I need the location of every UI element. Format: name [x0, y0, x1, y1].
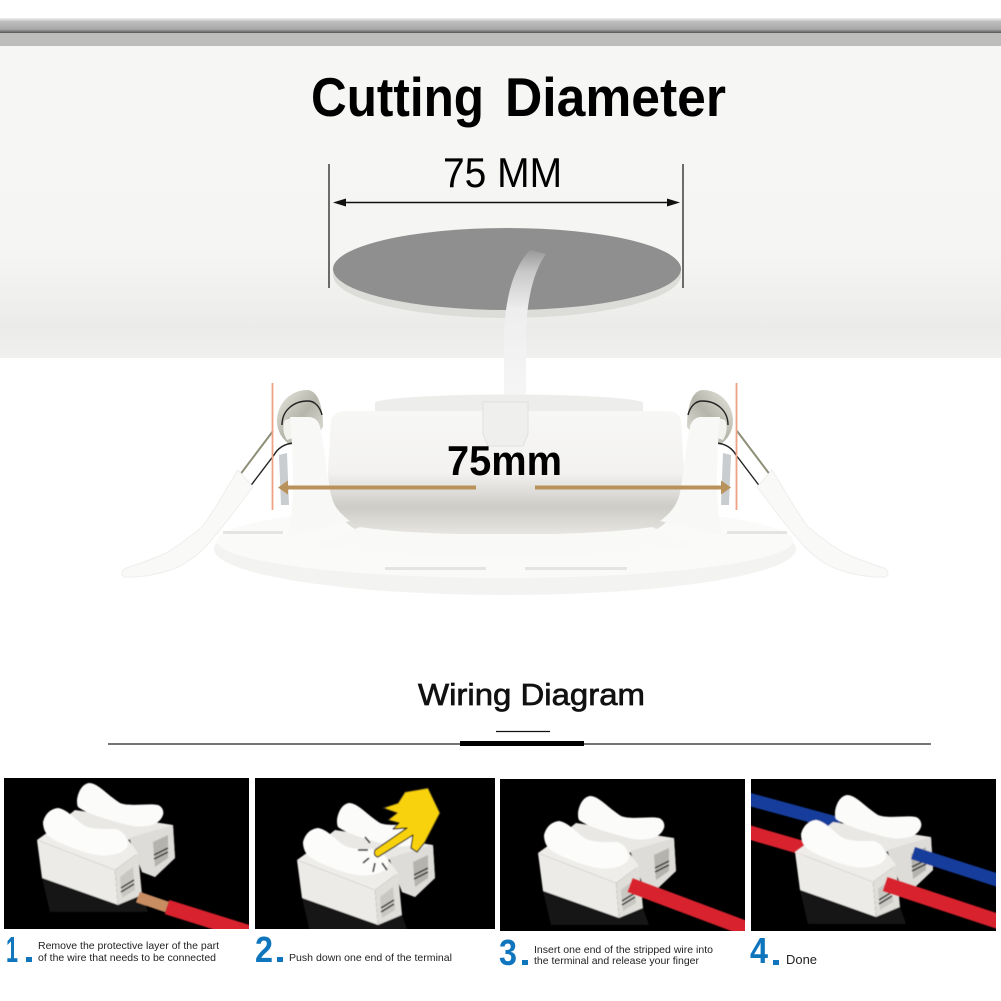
- step 4 caption: 4: [750, 930, 768, 971]
- cut hole: [333, 228, 681, 318]
- base ring: [316, 527, 692, 556]
- cable: [504, 250, 546, 398]
- step 3 caption: Insert one end of the stripped wire into: [534, 944, 713, 956]
- dimension: 75 MM: 75 MM: [443, 149, 562, 196]
- panel: step 1: [4, 778, 250, 933]
- top cap: [375, 394, 643, 422]
- left clip: [122, 390, 350, 577]
- downlight: [122, 390, 888, 595]
- wiring heading: Wiring Diagram: [418, 677, 645, 712]
- icon: yellow pointing hand: [374, 788, 440, 857]
- title: Cutting: [311, 66, 484, 128]
- right clip: [660, 390, 888, 577]
- step 1 caption: 1: [6, 929, 18, 970]
- step 1 caption: Remove the protective layer of the part: [38, 940, 219, 952]
- panel: step 2: [255, 778, 495, 932]
- red wire: [630, 885, 750, 930]
- step 4 caption: Done: [786, 952, 817, 967]
- panel: step 4: [748, 779, 1000, 931]
- title: [311, 66, 726, 128]
- ceiling panel: [0, 46, 1001, 358]
- title: Diameter: [505, 66, 726, 128]
- blue wire back: [748, 799, 840, 824]
- panel: step 3: [500, 779, 750, 931]
- press burst marks: [358, 837, 387, 872]
- step 2 caption: Push down one end of the terminal: [289, 952, 452, 964]
- blue wire front: [913, 853, 1000, 881]
- step 3 caption: 3: [499, 932, 517, 973]
- dimension: 75mm: [278, 437, 731, 494]
- step 2 caption: 2: [255, 929, 273, 970]
- stripped copper wire: [138, 897, 167, 907]
- step 1 caption: [6, 929, 219, 970]
- red wire front: [885, 884, 1000, 922]
- ceiling rail: [0, 18, 1001, 46]
- step 2 caption: [255, 929, 452, 970]
- red wire: [167, 907, 250, 933]
- step 3 caption: the terminal and release your finger: [534, 955, 699, 967]
- dimension: 75mm: 75mm: [447, 437, 562, 484]
- heading rule: [108, 732, 931, 746]
- dimension: 75 MM: [329, 149, 683, 288]
- orange guide lines: [272, 383, 736, 510]
- red wire back: [748, 832, 810, 850]
- step 1 caption: of the wire that needs to be connected: [38, 952, 216, 964]
- notch: [483, 402, 528, 446]
- step 4 caption: [750, 930, 817, 971]
- flange: [214, 503, 796, 595]
- step 3 caption: [499, 932, 713, 973]
- cup body: [328, 411, 684, 534]
